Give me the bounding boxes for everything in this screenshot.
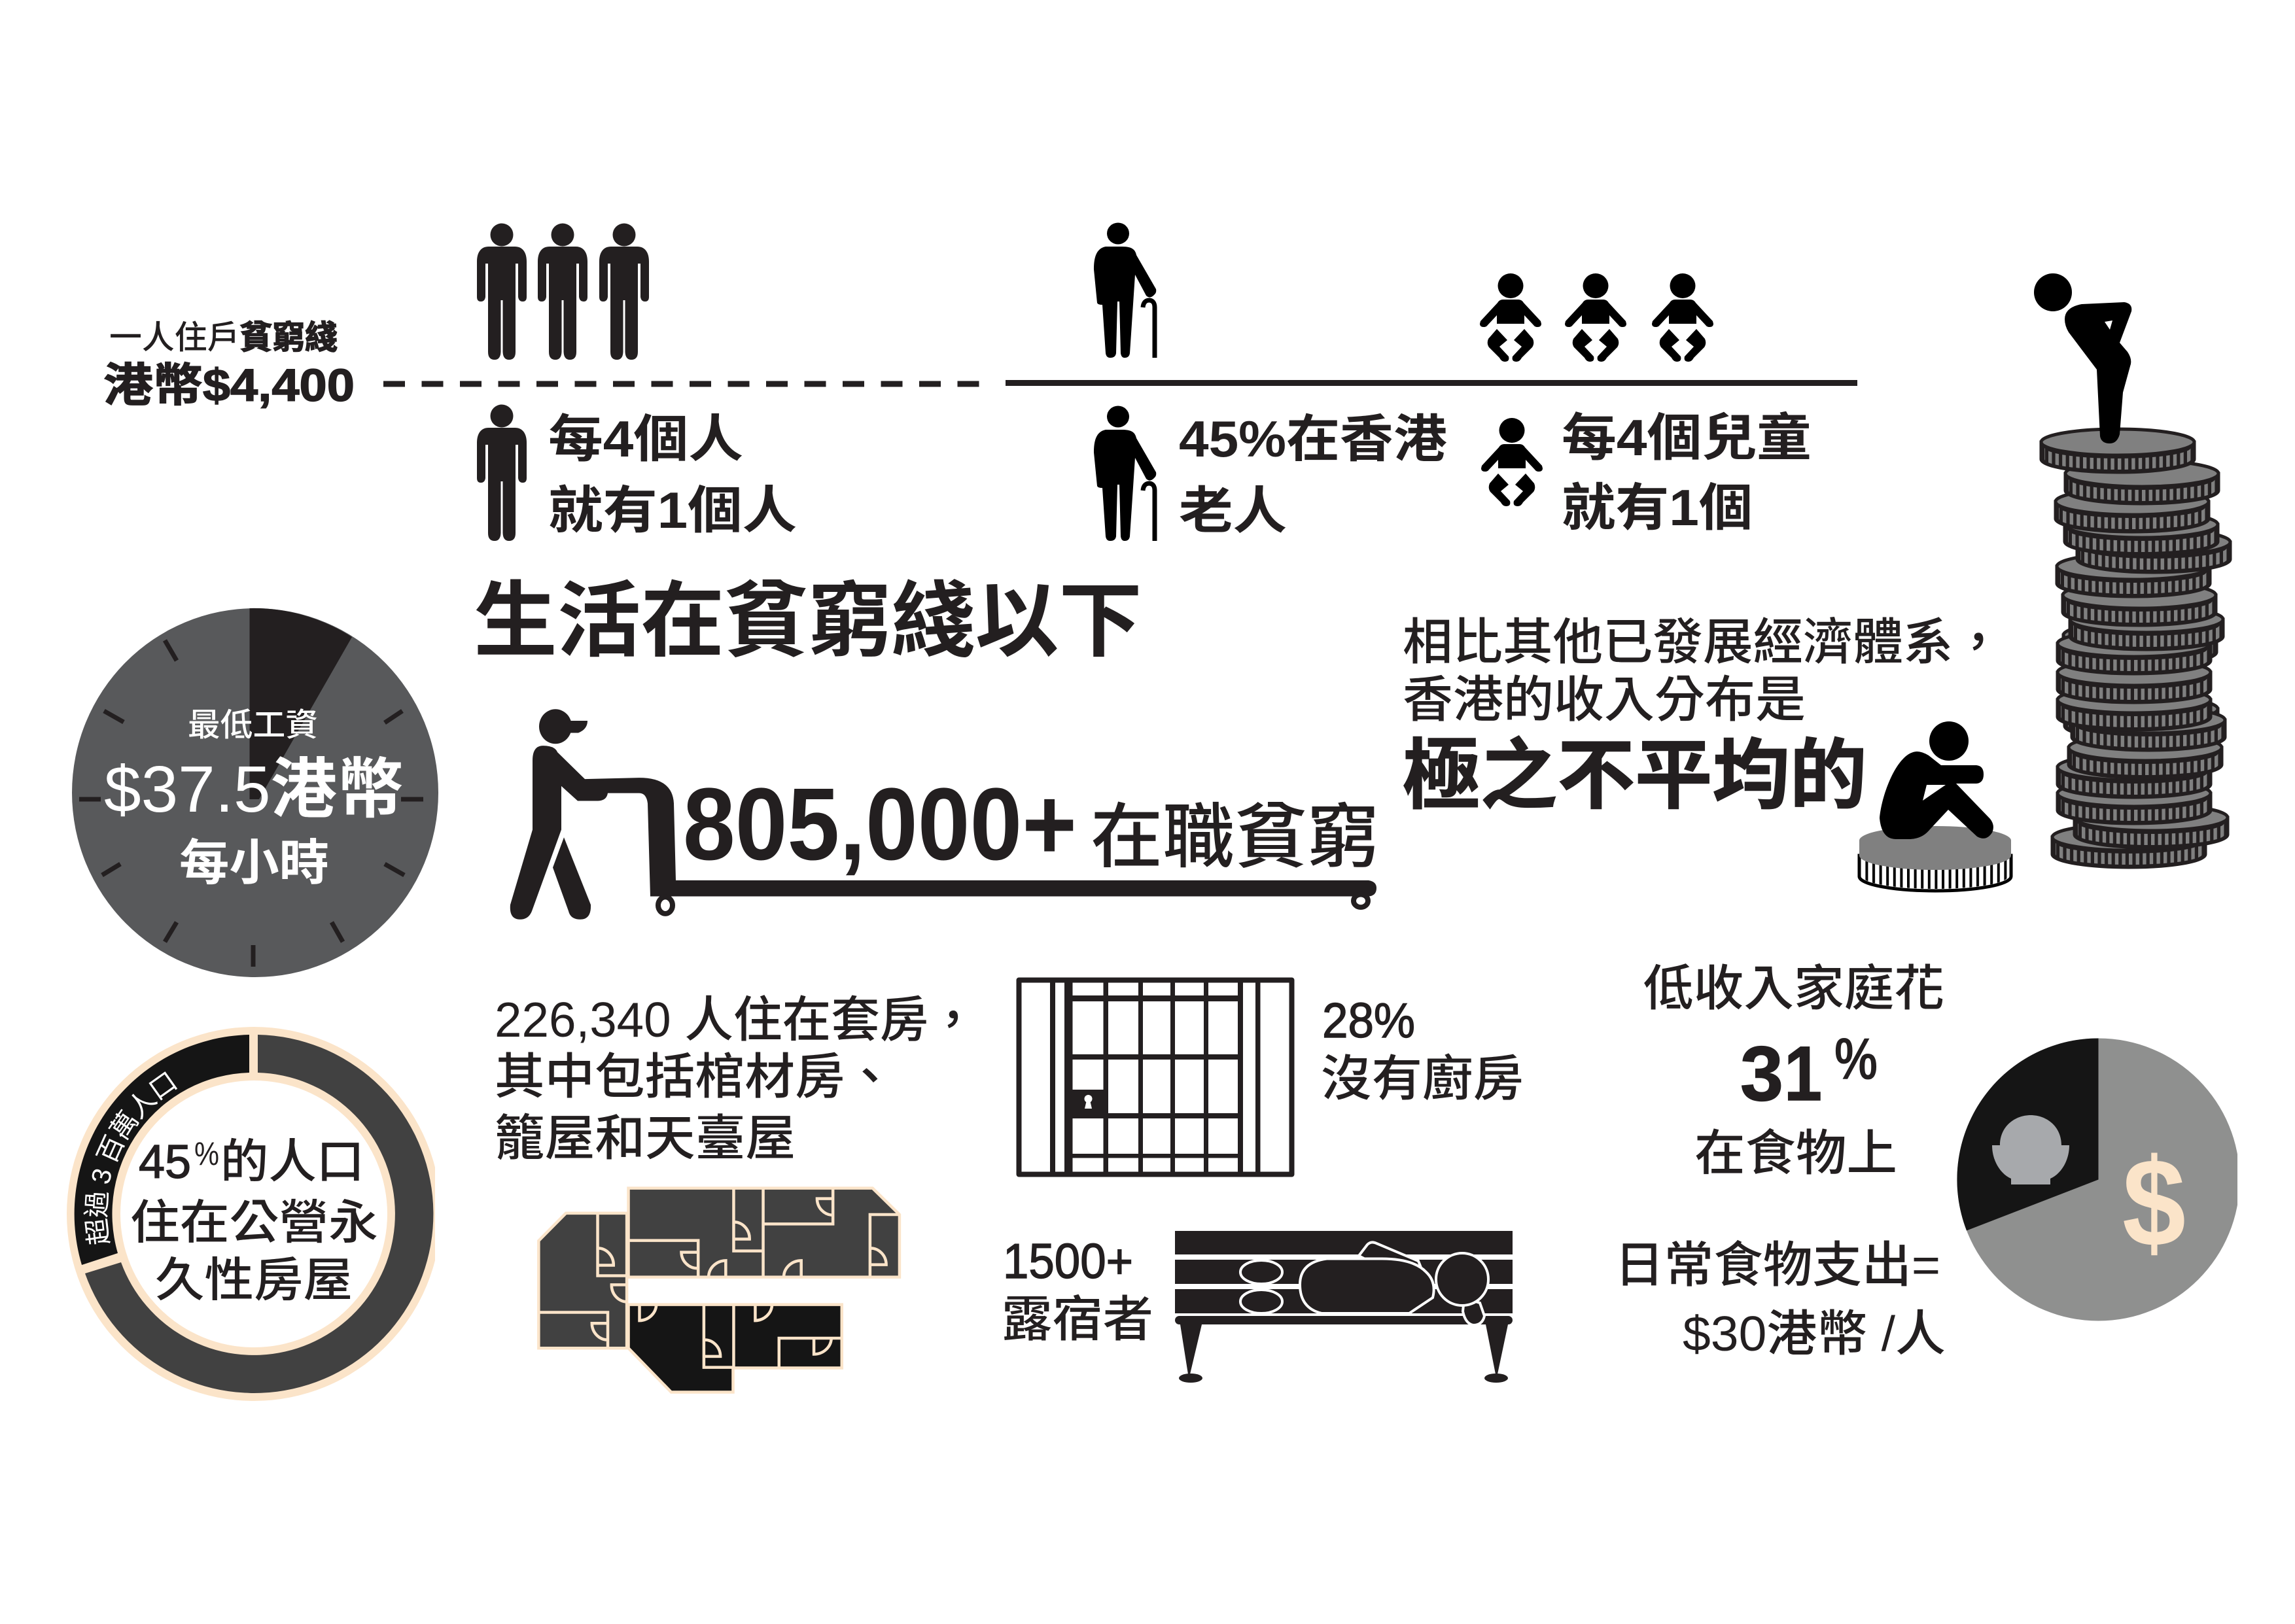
text: 45 percent of elderly: 45%在香港 <box>1179 410 1447 468</box>
text: one in four children: 就有1個 <box>1562 479 1753 536</box>
text: income distribution: 極之不平均的 <box>1403 733 1867 818</box>
icon: person standing on coins <box>2034 273 2131 443</box>
text: low income food spending: 低收入家庭花 <box>1643 961 1944 1016</box>
text: 805,000+ working poor: 在職貧窮 <box>1091 797 1379 876</box>
clock: minimum wage <box>72 608 438 977</box>
text: 28 percent no kitchen: 28% <box>1322 993 1415 1048</box>
floor plan <box>538 1188 900 1392</box>
text: income distribution: 相比其他已發展經濟體系， <box>1403 615 2003 670</box>
text: 45 percent of elderly: 老人 <box>1179 482 1287 540</box>
text: one in four people <box>548 410 797 539</box>
ring chart: public housing: 超過 3 百萬人口 <box>83 1071 177 1244</box>
text: low income food spending: 在食物上 <box>1694 1126 1897 1181</box>
text: subdivided housing: 籠屋和天臺屋 <box>495 1111 796 1166</box>
icon: three adults above line <box>477 224 649 360</box>
text: poverty line label: 一人住戶貧窮綫 <box>109 319 338 356</box>
text: one in four children <box>1562 409 1812 536</box>
text: low income food spending: 1 <box>1784 1031 1822 1117</box>
ring chart: public housing: 的人口 <box>220 1136 364 1188</box>
icon: rice bowl <box>1992 1115 2069 1184</box>
icon: person sleeping on bench <box>1175 1231 1513 1383</box>
text: one in four children: 每4個兒童 <box>1562 409 1812 466</box>
clock: minimum wage: $37.5港幣 <box>104 753 404 826</box>
text: 1500+ street sleepers <box>1002 1234 1153 1347</box>
text: 805,000+ working poor: 805,000+ <box>683 767 1077 882</box>
text: 28 percent no kitchen <box>1321 993 1524 1106</box>
text: 28 percent no kitchen: 沒有廚房 <box>1321 1051 1524 1106</box>
icon: single coin <box>1859 826 2011 891</box>
heading: living below the poverty line: 生活在貧窮綫以下 <box>474 575 1142 667</box>
icon: elder below line <box>1094 406 1156 541</box>
text: 805,000+ working poor <box>683 767 1379 882</box>
icon: baby below line <box>1481 418 1543 506</box>
text: income distribution <box>1403 615 2003 818</box>
icon: three babies above line <box>1480 273 1713 362</box>
icon: coin stack <box>2041 429 2230 867</box>
icon: elder above line <box>1094 222 1156 358</box>
poverty line: dashed then solid <box>383 380 1857 386</box>
text: low income food spending: $30港幣 /人 <box>1683 1306 1946 1361</box>
pie chart: food share: $ <box>2122 1132 2186 1273</box>
text: low income food spending <box>1615 961 1946 1361</box>
text: 45 percent of elderly <box>1179 410 1447 540</box>
ring chart: public housing <box>67 1027 435 1401</box>
text: one in four people: 每4個人 <box>548 410 743 468</box>
text: subdivided housing <box>495 992 977 1166</box>
pie chart: food share <box>1957 1039 2240 1321</box>
icon: adult below line <box>477 404 527 541</box>
ring chart: public housing: 45 <box>139 1136 191 1188</box>
text: subdivided housing: 其中包括棺材房、 <box>495 1049 895 1104</box>
ring chart: public housing: 住在公營永 <box>130 1197 378 1249</box>
text: 1500+ street sleepers: 露宿者 <box>1002 1292 1153 1347</box>
text: low income food spending: % <box>1834 1027 1878 1092</box>
text: low income food spending: 3 <box>1740 1031 1783 1117</box>
text: low income food spending: 日常食物支出= <box>1615 1237 1940 1292</box>
text: poverty line label: 港幣$4,400 <box>103 360 355 411</box>
icon: worker pushing cart <box>510 709 1376 920</box>
icon: barred cage window <box>1019 978 1291 1177</box>
text: income distribution: 香港的收入分布是 <box>1403 672 1806 728</box>
text: one in four people: 就有1個人 <box>548 481 797 539</box>
clock: minimum wage: 每小時 <box>179 835 329 890</box>
icon: crouching person <box>1880 721 1993 839</box>
text: 1500+ street sleepers: 1500+ <box>1003 1234 1133 1288</box>
ring chart: public housing: % <box>194 1135 219 1172</box>
text: subdivided housing: 226,340 人住在套房， <box>495 992 977 1047</box>
text: poverty line label <box>103 319 355 411</box>
clock: minimum wage: 最低工資 <box>188 708 318 743</box>
ring chart: public housing: 久性房屋 <box>155 1254 353 1307</box>
